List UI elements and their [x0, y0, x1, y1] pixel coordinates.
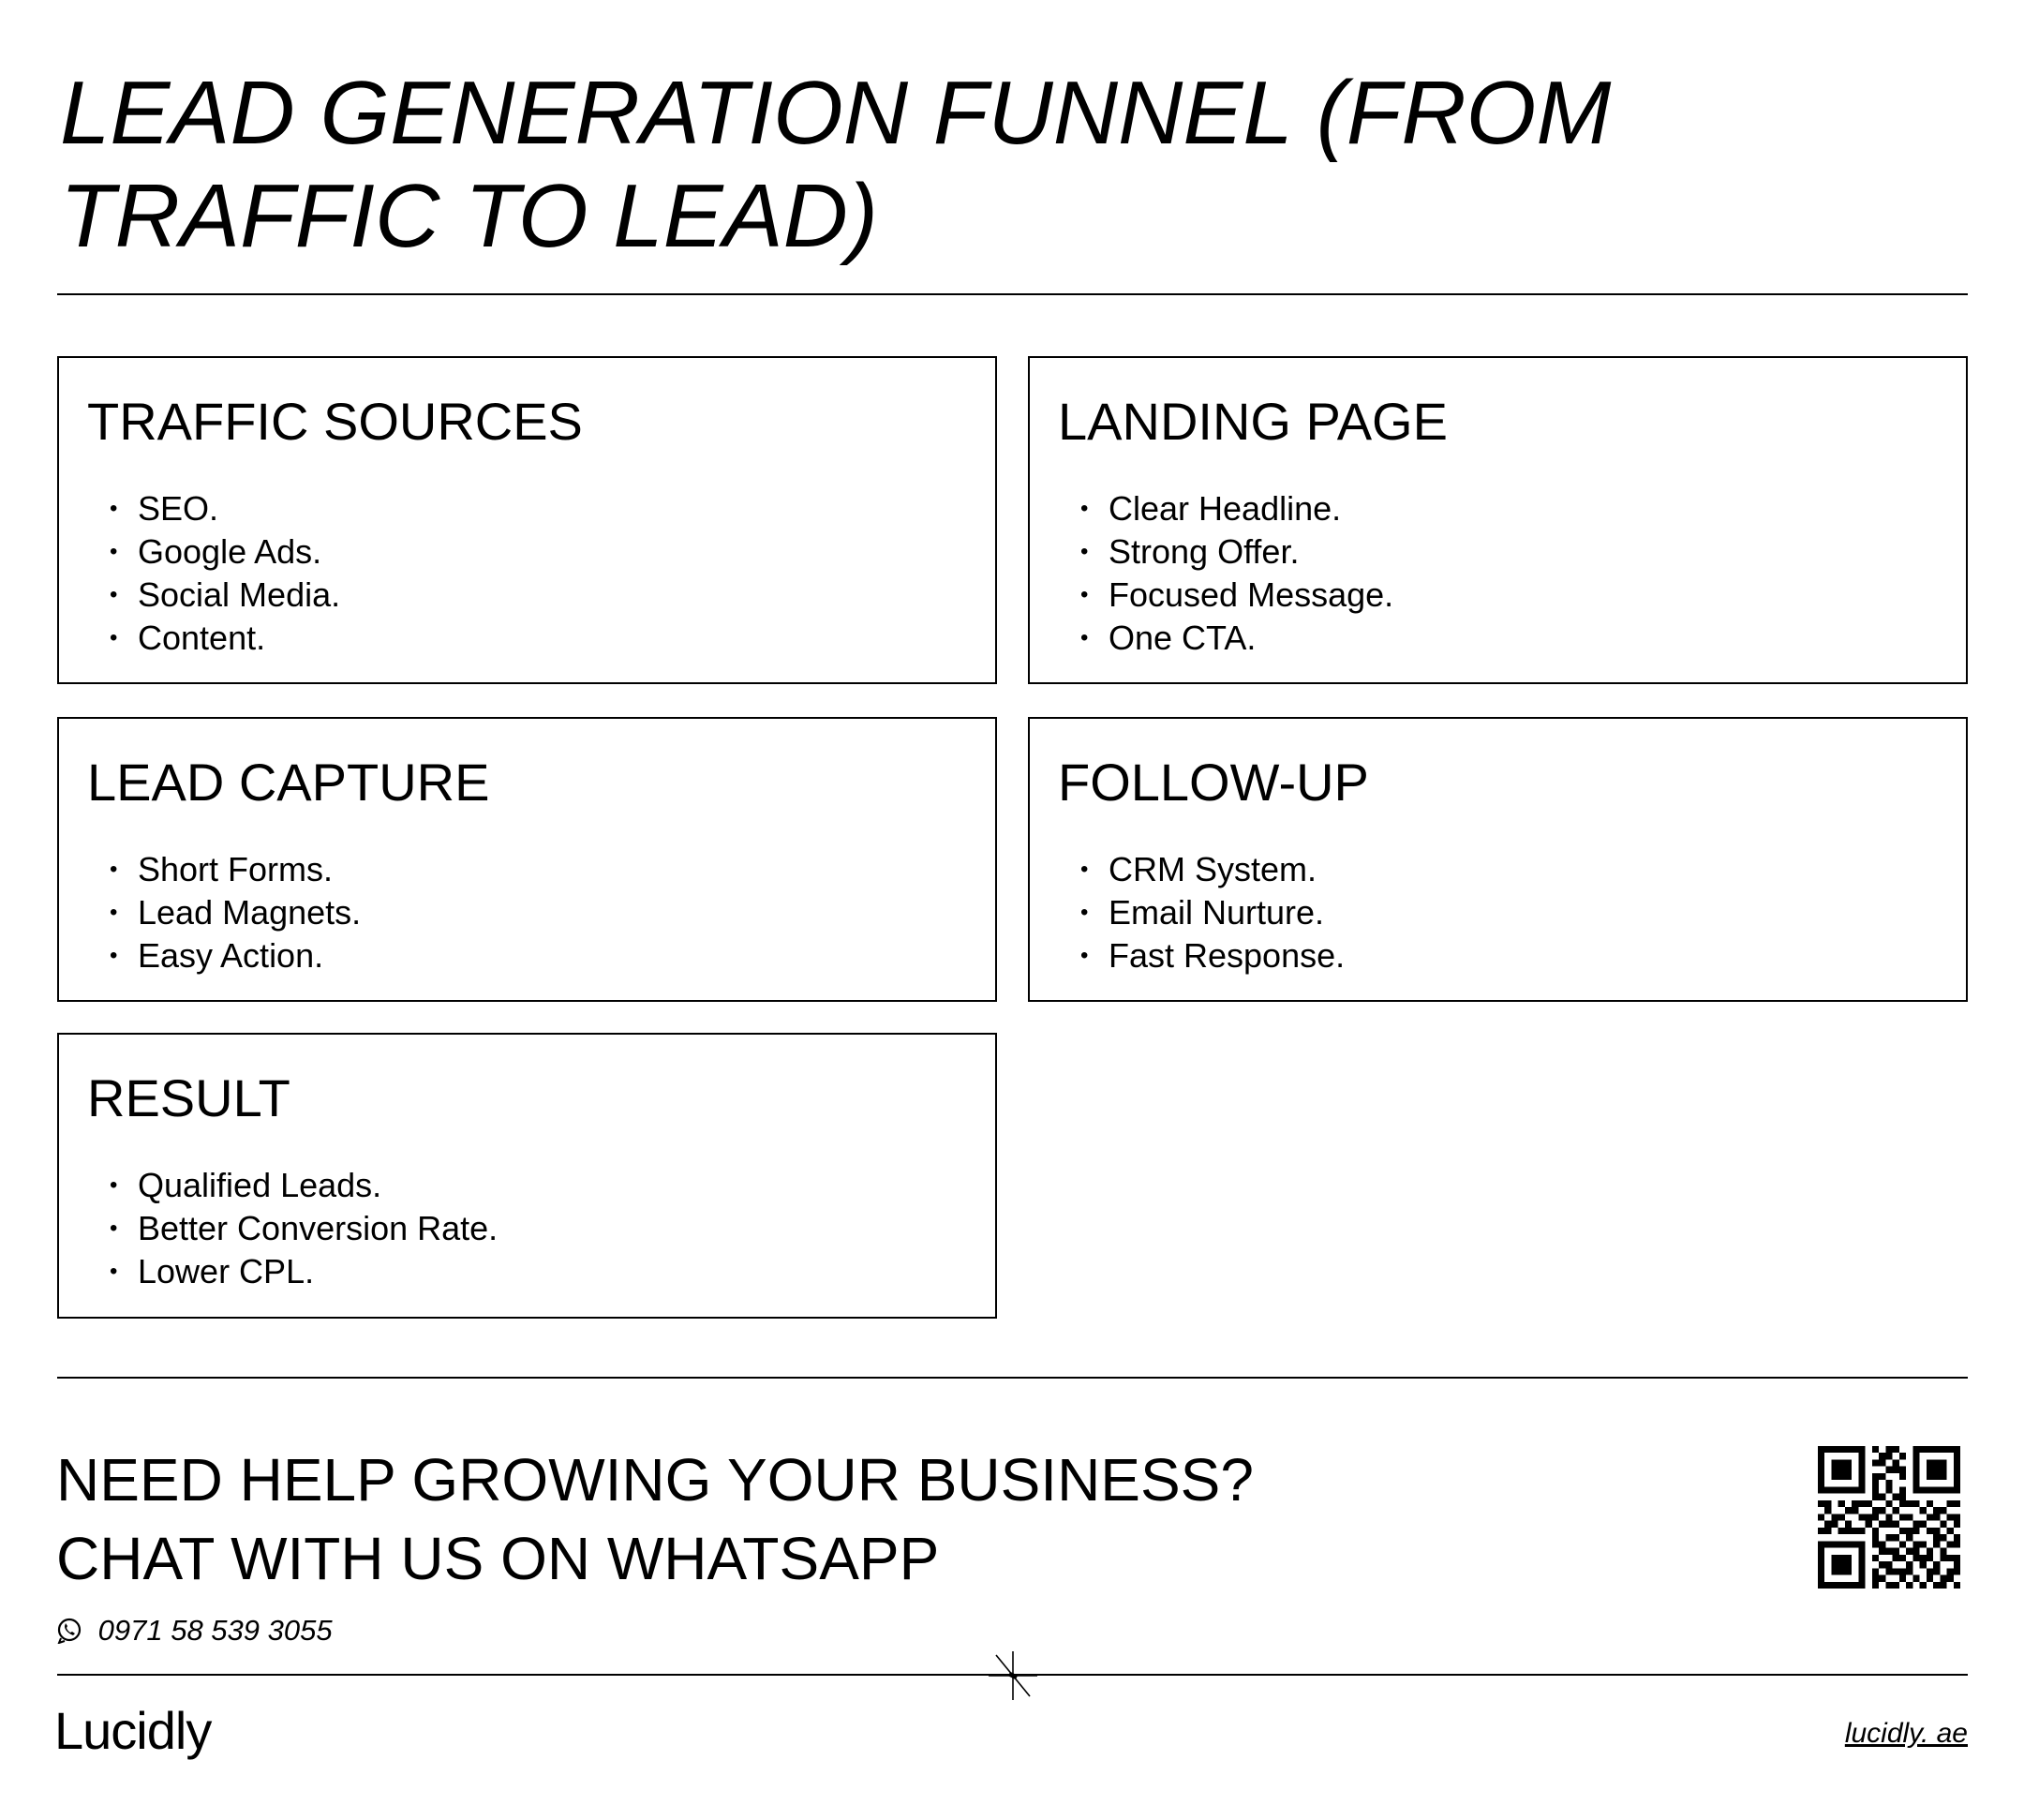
- panel: follow-up: FOLLOW-UP: [1058, 753, 1369, 812]
- website link: lucidly. ae: [1845, 1718, 1968, 1749]
- panel: lead capture: Lead Magnets.: [138, 893, 361, 932]
- panel: result: [57, 1033, 997, 1319]
- logo: Lucidly: Lucidly: [54, 1701, 211, 1760]
- title: [60, 63, 1612, 266]
- phone number with whatsapp icon: 0971 58 539 3055: [98, 1614, 333, 1647]
- panel: follow-up: Email Nurture.: [1109, 893, 1324, 932]
- panel: landing page: Clear Headline.: [1109, 489, 1341, 528]
- panel: landing page: Focused Message.: [1109, 575, 1393, 614]
- panel: follow-up: CRM System.: [1109, 850, 1317, 888]
- panel: lead capture: [57, 717, 997, 1002]
- panel: follow-up: [1028, 717, 1968, 1002]
- panel: traffic sources: Social Media.: [138, 575, 340, 614]
- panel: follow-up: Fast Response.: [1109, 936, 1345, 975]
- panel: result: RESULT: [87, 1068, 290, 1127]
- panel: traffic sources: SEO.: [138, 489, 218, 528]
- panel: traffic sources: TRAFFIC SOURCES: [87, 392, 583, 451]
- call to action text: [56, 1446, 1254, 1592]
- icon: sparkle star: [989, 1651, 1037, 1700]
- panel: lead capture: Short Forms.: [138, 850, 333, 888]
- panel: landing page: LANDING PAGE: [1058, 392, 1448, 451]
- panel: traffic sources: Google Ads.: [138, 532, 321, 571]
- panel: traffic sources: Content.: [138, 619, 265, 657]
- panel: landing page: One CTA.: [1109, 619, 1256, 657]
- panel: landing page: [1028, 356, 1968, 684]
- title: LEAD GENERATION FUNNEL (FROM: [60, 63, 1611, 163]
- panel: result: Qualified Leads.: [138, 1166, 381, 1204]
- title: TRAFFIC TO LEAD): [60, 166, 878, 266]
- panel: result: Lower CPL.: [138, 1252, 314, 1290]
- panel: result: Better Conversion Rate.: [138, 1209, 498, 1247]
- panel: lead capture: Easy Action.: [138, 936, 323, 975]
- call to action text: NEED HELP GROWING YOUR BUSINESS?: [56, 1446, 1254, 1514]
- panel: landing page: Strong Offer.: [1109, 532, 1299, 571]
- panel: traffic sources: [57, 356, 997, 684]
- call to action text: CHAT WITH US ON WHATSAPP: [56, 1525, 939, 1592]
- qr code: [1818, 1446, 1960, 1589]
- panel: lead capture: LEAD CAPTURE: [87, 753, 489, 812]
